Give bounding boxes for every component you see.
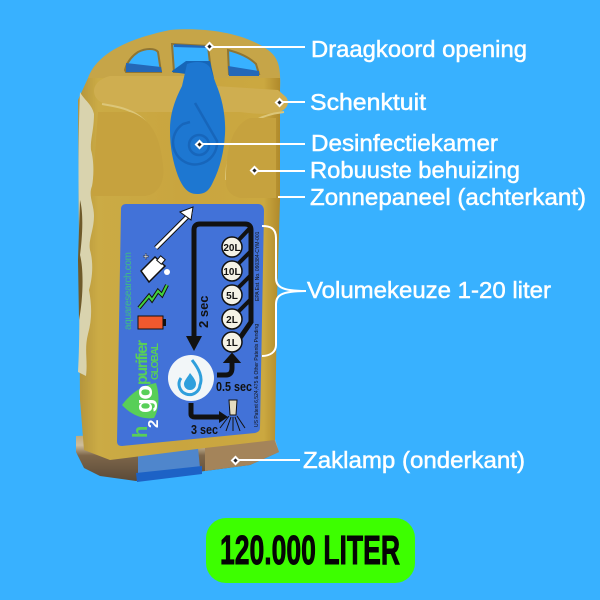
- patent: US Patent 6,524,475 & Other Patents Pending: [254, 324, 260, 427]
- labels: [303, 36, 586, 473]
- flashlight base: [76, 430, 279, 481]
- 3 sec label: 3 sec: [191, 423, 218, 437]
- volume buttons: 1L: [226, 338, 238, 349]
- label: Draagkoord opening: Draagkoord opening: [311, 36, 527, 62]
- global brand: GLOBAL: [150, 343, 161, 380]
- spout ridge: [94, 76, 288, 114]
- label: Zonnepaneel: Zonnepaneel (achterkant): [310, 184, 586, 210]
- icon: key bottle: [141, 252, 170, 282]
- 0.5 sec arrow: [217, 360, 232, 375]
- white arrow: [156, 214, 190, 248]
- volume buttons: [222, 237, 242, 352]
- purifier brand: purifier: [134, 340, 151, 385]
- aquaresearch url: aquaresearch.com: [123, 252, 134, 330]
- icon: key bottle: +: [143, 252, 149, 263]
- h2go logo: h: [130, 426, 152, 438]
- 2 sec label: 2 sec: [196, 295, 211, 328]
- cap drop logo: [173, 103, 217, 164]
- label: Volumekeuze: Volumekeuze 1-20 liter: [307, 277, 551, 303]
- icon: solar zigzag: [139, 285, 167, 308]
- 3 sec arrow: [191, 403, 220, 417]
- icon: flashlight: [220, 400, 245, 431]
- branch lines: [234, 228, 250, 316]
- h2go logo: go: [131, 385, 158, 413]
- main body: [78, 78, 280, 460]
- handle: [88, 29, 280, 90]
- label: Zaklamp: Zaklamp (onderkant): [303, 447, 525, 473]
- EPA number: EPA Est. No. 090384-CYM-001: [255, 231, 261, 301]
- capacity badge: [206, 518, 415, 583]
- 0.5 sec label: 0.5 sec: [216, 380, 252, 394]
- icon: battery: [138, 316, 166, 329]
- capacity badge: 120.000 LITER: [220, 527, 400, 573]
- ridge shadow: [102, 104, 284, 180]
- purifier device: [76, 29, 288, 482]
- blue label panel: [117, 204, 264, 446]
- loop arrow flow: [194, 224, 251, 340]
- h2go logo: [122, 383, 162, 438]
- blue silicone cap: [170, 61, 225, 194]
- main button: [168, 355, 214, 401]
- label: Robuuste behuizing: Robuuste behuizing: [310, 157, 520, 183]
- h2go logo: 2: [145, 420, 162, 428]
- blue strap behind handle: [126, 44, 259, 76]
- volume buttons: 10L: [223, 267, 241, 278]
- callout leader lines: [200, 47, 306, 460]
- volume buttons: 2L: [226, 315, 238, 326]
- robust housing panels: [92, 112, 163, 196]
- label: Schenktuit: Schenktuit: [310, 89, 426, 115]
- label: Desinfectiekamer: Desinfectiekamer: [311, 130, 498, 156]
- left pale grip: [78, 92, 94, 376]
- volume buttons: 5L: [226, 291, 238, 302]
- callout markers: [196, 43, 283, 464]
- volume buttons: 20L: [223, 243, 241, 254]
- handle holes: [125, 44, 259, 74]
